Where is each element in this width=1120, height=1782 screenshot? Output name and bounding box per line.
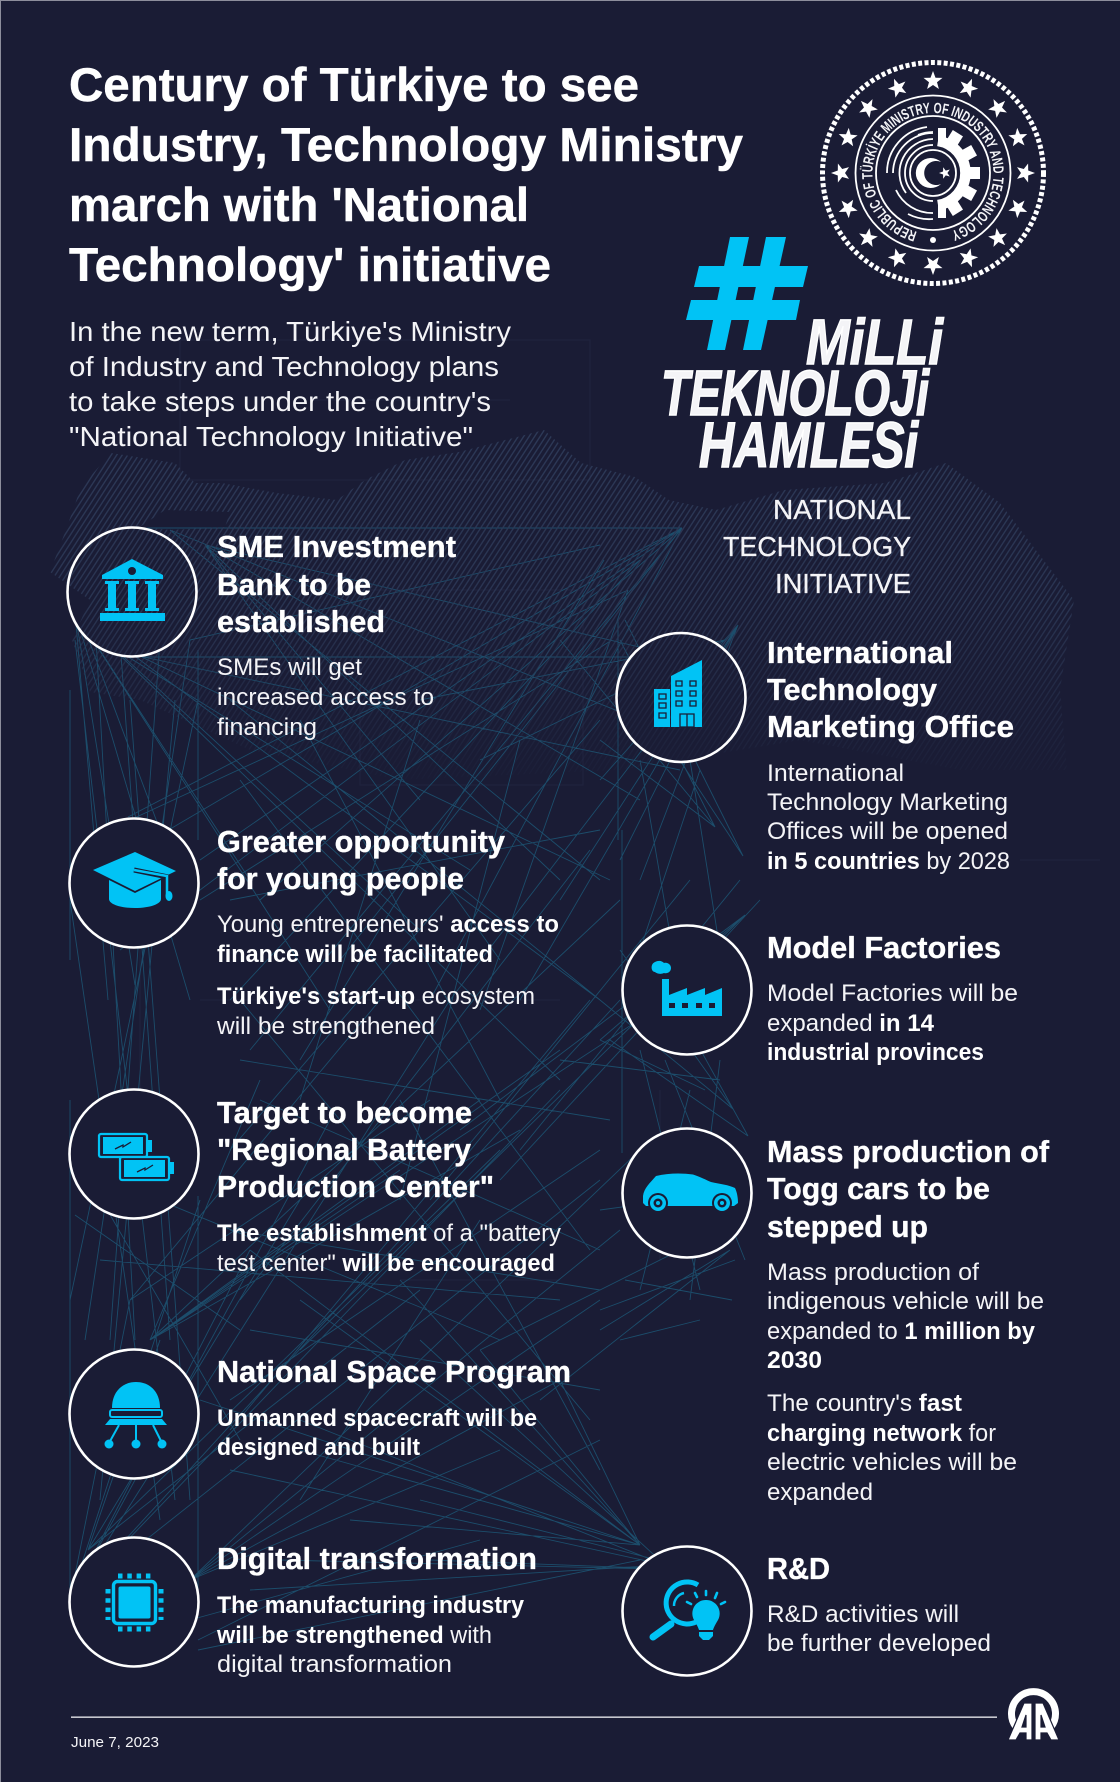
- panel: SME Investment Bank: established: [217, 604, 385, 639]
- icon: hash symbol: [686, 237, 808, 350]
- national technology initiative label: INITIATIVE: [775, 568, 911, 599]
- Türkiye map hatch background: [50, 430, 1074, 742]
- panel: National Space Program: designed and built: [217, 1434, 420, 1461]
- title: Century of Türkiye to see: [69, 58, 639, 111]
- date: June 7, 2023: [71, 1734, 159, 1751]
- ministry seal: REPUBLIC OF TÜRKİYE MINISTRY OF INDUSTRY AND TECHNOLOGY: [860, 102, 1004, 242]
- ministry seal: [820, 60, 1046, 286]
- panel: R&D: [622, 1546, 991, 1676]
- panel: Greater opportunity for young people: Türkiye's start-up ecosystem: [217, 983, 535, 1010]
- panel: Regional Battery Production Center: test center" will be encouraged: [217, 1250, 555, 1277]
- panel: R&D: R&D activities will: [767, 1601, 959, 1628]
- panel: Mass production of Togg cars: indigenous vehicle will be: [767, 1288, 1044, 1315]
- panel: Greater opportunity for young people: finance will be facilitated: [217, 941, 493, 968]
- panel: R&D: R&D: [767, 1551, 830, 1586]
- panel: Model Factories: Model Factories will be: [767, 980, 1018, 1007]
- panel: Mass production of Togg cars: [622, 1128, 1050, 1506]
- panel: Mass production of Togg cars: 2030: [767, 1347, 822, 1374]
- panel: Greater opportunity for young people: [70, 818, 559, 1040]
- panel: Mass production of Togg cars: Togg cars to be: [767, 1171, 990, 1206]
- title: [69, 58, 743, 291]
- panel: Regional Battery Production Center: The establishment of a "battery: [217, 1220, 562, 1247]
- panel: Model Factories: expanded in 14: [767, 1010, 934, 1037]
- hashtag logo: MİLLİ TEKNOLOJİ HAMLESİ: TEKNOLOJi: [661, 357, 930, 429]
- panel: International Technology Marketing Office: Offices will be opened: [767, 818, 1008, 845]
- panel: International Technology Marketing Office: Marketing Office: [767, 709, 1014, 744]
- icon: car: [643, 1174, 738, 1213]
- subtitle: In the new term, Türkiye's Ministry: [69, 316, 511, 347]
- panel: National Space Program: Unmanned spacecraft will be: [217, 1405, 537, 1432]
- footer rule: [71, 1716, 997, 1718]
- panel: Mass production of Togg cars: charging network for: [767, 1420, 996, 1447]
- panel: Model Factories: Model Factories: [767, 930, 1001, 965]
- icon: bank: [100, 559, 165, 621]
- panel: Mass production of Togg cars: The country's fast: [767, 1390, 962, 1417]
- icon: batteries: [99, 1134, 174, 1180]
- panel: Mass production of Togg cars: expanded to 1 million by: [767, 1318, 1035, 1345]
- panel: SME Investment Bank: increased access to: [217, 684, 434, 711]
- panel: International Technology Marketing Office: in 5 countries by 2028: [767, 848, 1010, 875]
- panel: International Technology Marketing Office: Technology: [767, 672, 938, 707]
- panel: International Technology Marketing Office: International: [767, 635, 953, 670]
- panel: International Technology Marketing Office: Technology Marketing: [767, 789, 1008, 816]
- panel: SME Investment Bank: SME Investment: [217, 529, 456, 564]
- icon: magnifier and light bulb: [653, 1582, 725, 1640]
- panel: Digital transformation: digital transformation: [217, 1651, 452, 1678]
- panel: Greater opportunity for young people: Greater opportunity: [217, 824, 506, 859]
- icon: graduation cap: [93, 852, 176, 908]
- panel: Greater opportunity for young people: for young people: [217, 861, 464, 896]
- panel: SME Investment Bank: [68, 528, 456, 741]
- hashtag logo: MİLLİ TEKNOLOJİ HAMLESİ: [661, 237, 944, 481]
- panel: International Technology Marketing Office: International: [767, 760, 904, 787]
- title: march with 'National: [69, 178, 529, 231]
- panel: Regional Battery Production Center: [70, 1090, 562, 1277]
- panel: Regional Battery Production Center: Target to become: [217, 1095, 472, 1130]
- national technology initiative label: NATIONAL: [773, 494, 911, 525]
- panel: Model Factories: [622, 926, 1018, 1066]
- hashtag logo: MİLLİ TEKNOLOJİ HAMLESİ: MiLLi: [806, 306, 944, 378]
- icon: office buildings: [654, 660, 702, 727]
- icon: Anadolu Agency logo: [1008, 1692, 1059, 1740]
- icon: microchip: [108, 1576, 161, 1629]
- panel: Greater opportunity for young people: Young entrepreneurs' access to: [217, 911, 559, 938]
- panel: Digital transformation: will be strengthened with: [216, 1622, 492, 1649]
- panel: Digital transformation: The manufacturing industry: [217, 1592, 524, 1619]
- panel: Mass production of Togg cars: electric vehicles will be: [767, 1449, 1017, 1476]
- panel: Mass production of Togg cars: stepped up: [767, 1209, 928, 1244]
- panel: International Technology Marketing Office: [616, 633, 1014, 875]
- national technology initiative label: [723, 494, 911, 599]
- panel: Regional Battery Production Center: Production Center": [217, 1169, 494, 1204]
- icon: spacecraft: [104, 1382, 167, 1448]
- hashtag logo: MİLLİ TEKNOLOJİ HAMLESİ: HAMLESi: [699, 409, 919, 481]
- panel: R&D: be further developed: [767, 1630, 991, 1657]
- title: Industry, Technology Ministry: [69, 118, 743, 171]
- panel: Mass production of Togg cars: Mass production of: [767, 1134, 1050, 1169]
- panel: Model Factories: industrial provinces: [767, 1039, 984, 1066]
- panel: Mass production of Togg cars: Mass production of: [767, 1259, 979, 1286]
- panel: SME Investment Bank: SMEs will get: [217, 654, 362, 681]
- panel: National Space Program: National Space Program: [217, 1354, 571, 1389]
- circle backdrops: [68, 528, 751, 1675]
- title: Technology' initiative: [69, 238, 551, 291]
- subtitle: [69, 316, 511, 452]
- panel: Digital transformation: Digital transformation: [217, 1541, 537, 1576]
- icon: factory: [652, 961, 722, 1016]
- panel: SME Investment Bank: financing: [217, 714, 317, 741]
- national technology initiative label: TECHNOLOGY: [723, 531, 911, 562]
- subtitle: "National Technology Initiative": [69, 421, 473, 452]
- subtitle: of Industry and Technology plans: [69, 351, 499, 382]
- network lines background: [70, 528, 760, 1650]
- panel: Digital transformation: [70, 1538, 537, 1678]
- subtitle: to take steps under the country's: [69, 386, 491, 417]
- panel: SME Investment Bank: Bank to be: [217, 567, 371, 602]
- panel: Regional Battery Production Center: "Regional Battery: [217, 1132, 472, 1167]
- panel: National Space Program: [70, 1350, 571, 1478]
- panel: Mass production of Togg cars: expanded: [767, 1479, 873, 1506]
- panel: Greater opportunity for young people: will be strengthened: [216, 1013, 435, 1040]
